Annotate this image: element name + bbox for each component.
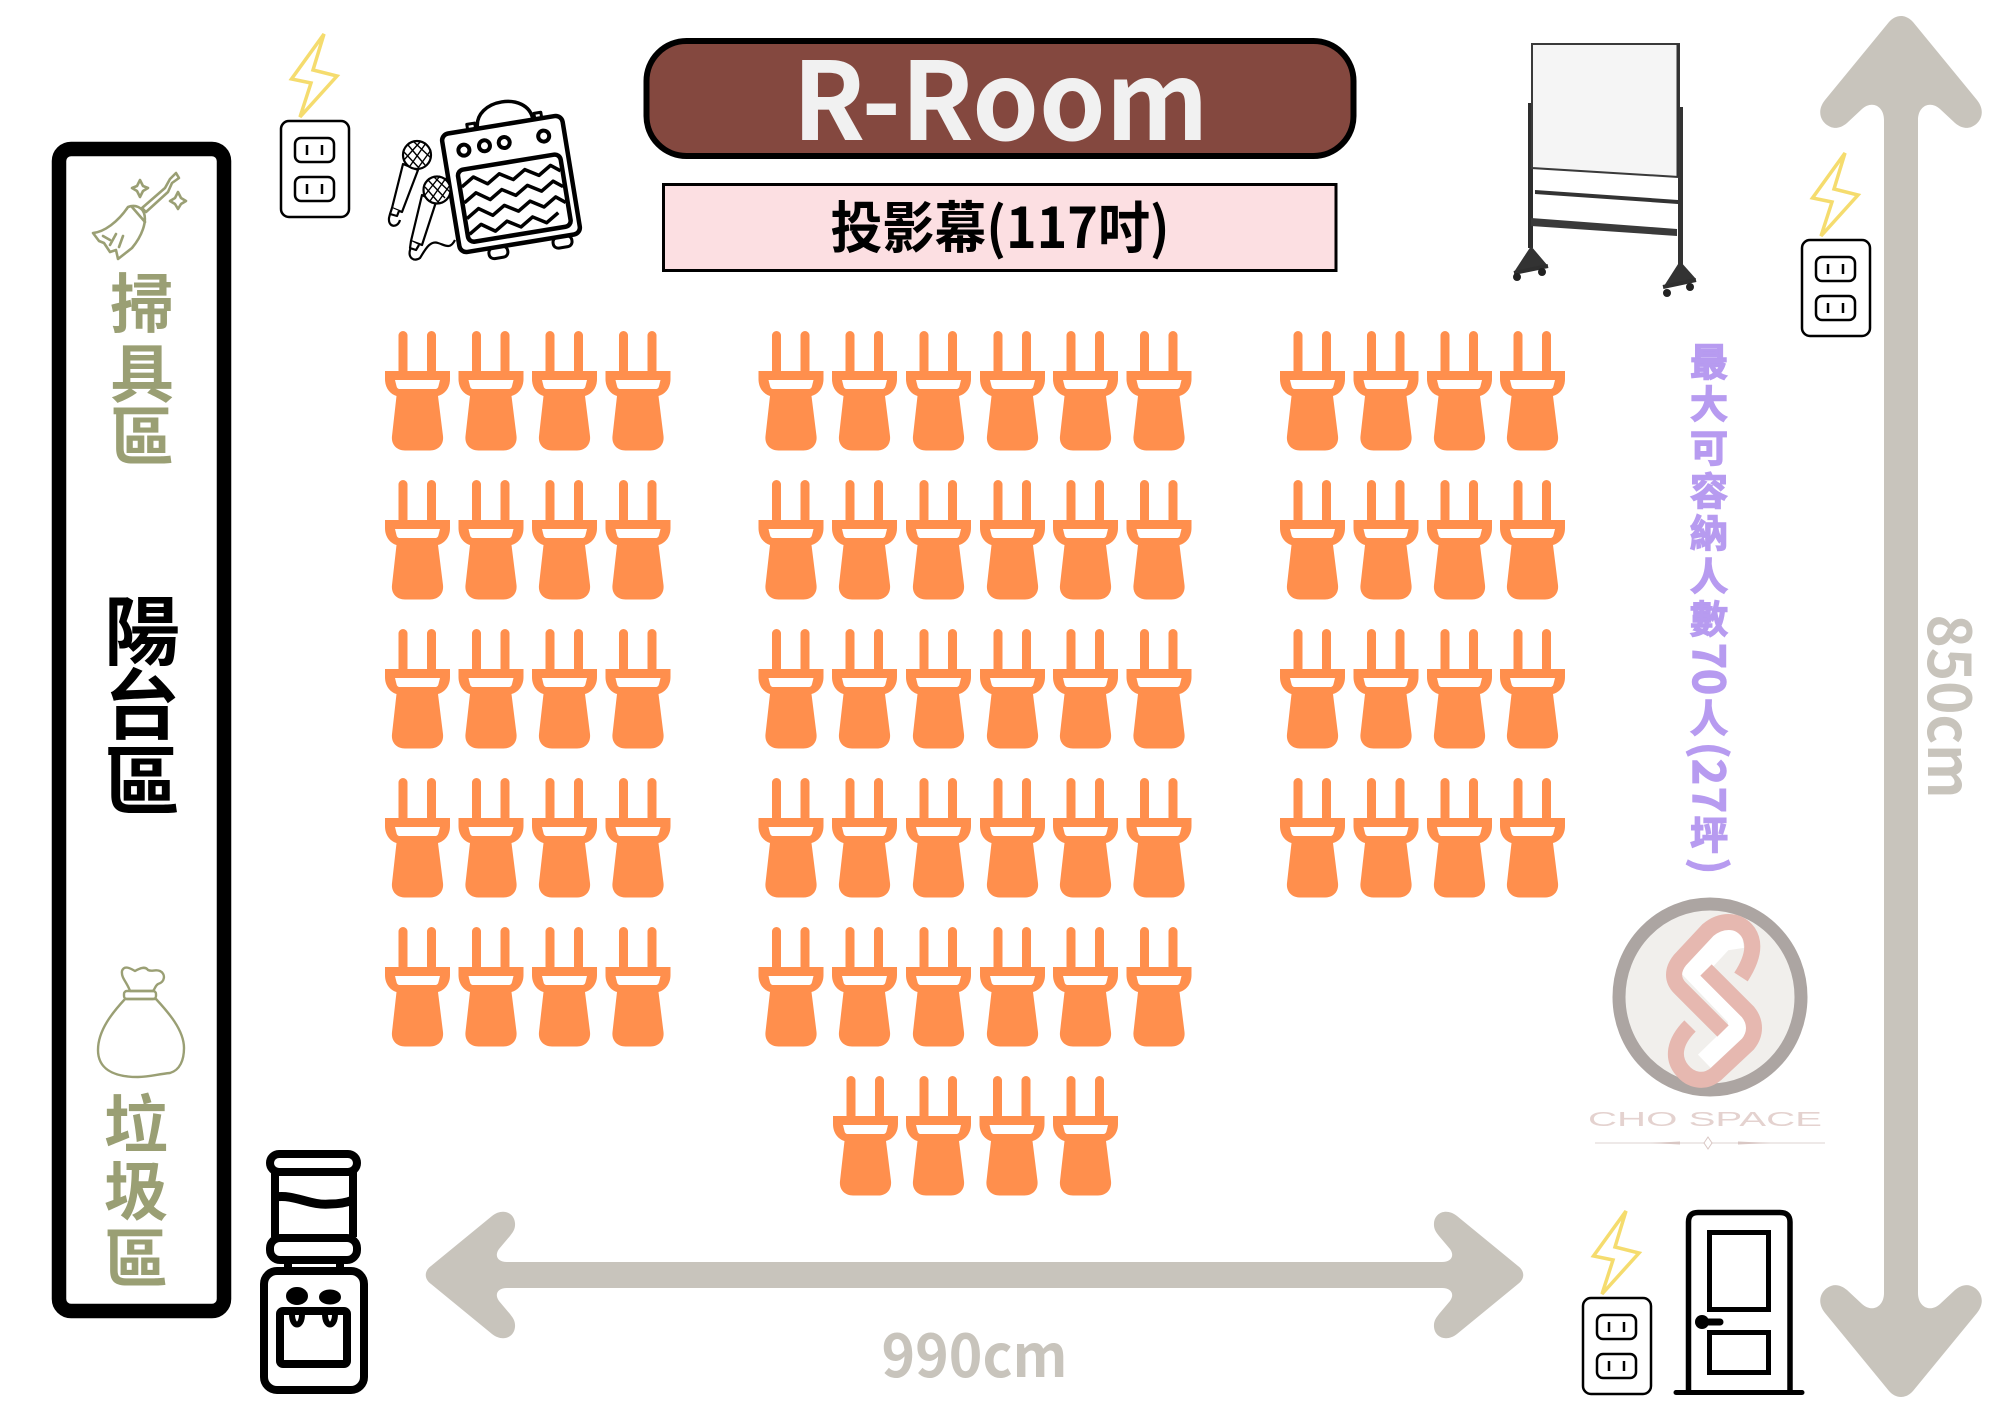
icon: power outlet [281, 121, 349, 217]
icon: door power outlet [1583, 1298, 1651, 1394]
capacity label: vertical text: ) [1682, 858, 1743, 874]
title banner: R-Room [792, 16, 1208, 172]
chairs: right block [1280, 331, 1565, 898]
arrow: vertical dimension [1820, 16, 1982, 1397]
capacity label: vertical text: 納 [1690, 503, 1728, 558]
capacity label: vertical text: 2 [1680, 759, 1744, 785]
projection screen label: 投影幕(117吋) [830, 184, 1170, 265]
title banner [646, 16, 1354, 172]
icon: lightning bolt above outlet [292, 34, 337, 117]
capacity label: vertical text: 坪 [1690, 805, 1728, 860]
icon: water dispenser [264, 1154, 364, 1390]
capacity label: vertical text: 數 [1690, 589, 1728, 644]
capacity label: vertical text: 容 [1690, 461, 1728, 516]
dimension label: 850cm: 850cm [1911, 614, 1996, 798]
logo: CHO SPACE: CHO SPACE [1588, 1109, 1822, 1131]
chairs: centre block [758, 331, 1192, 1046]
capacity label: vertical text: 人 [1690, 546, 1728, 601]
icon: whiteboard on stand [1513, 44, 1696, 297]
icon: broom [93, 173, 186, 259]
capacity label: vertical text: ( [1682, 742, 1743, 758]
capacity label: vertical text: 最 [1690, 332, 1728, 387]
icon: trash bag [98, 968, 184, 1077]
capacity label: vertical text: 可 [1690, 418, 1728, 473]
projection screen label [664, 184, 1336, 270]
icon: lightning bolt above right outlet [1812, 153, 1858, 236]
capacity label: vertical text: 7 [1680, 787, 1744, 813]
heading: cleaning tools zone [110, 254, 174, 479]
capacity label: vertical text: 0 [1680, 669, 1744, 695]
capacity label: vertical text [1680, 332, 1744, 874]
icon: door [1676, 1212, 1802, 1392]
icon: lightning bolt above door outlet [1594, 1211, 1639, 1294]
icon: microphones [389, 141, 455, 260]
capacity label: vertical text: 人 [1690, 688, 1728, 743]
heading: garbage zone: 圾 [104, 1142, 168, 1234]
capacity label: vertical text: 7 [1680, 643, 1744, 669]
logo: CHO SPACE [1588, 904, 1825, 1149]
panel: balcony zone frame [59, 149, 224, 1311]
chairs: back row [833, 1076, 1118, 1196]
icon: right power outlet [1802, 240, 1870, 336]
dimension label: 990cm: 990cm [882, 1309, 1068, 1394]
heading: garbage zone: 區 [104, 1209, 168, 1301]
heading: garbage zone: 垃 [104, 1075, 168, 1167]
capacity label: vertical text: 大 [1690, 374, 1728, 429]
heading: cleaning tools zone: 具 [110, 324, 174, 416]
heading: garbage zone [104, 1075, 168, 1301]
heading: balcony zone: 陽 [104, 571, 180, 681]
chairs: left block [385, 331, 670, 1046]
heading: balcony zone: 區 [104, 721, 180, 831]
heading: cleaning tools zone: 區 [110, 387, 174, 479]
heading: balcony zone: 台 [104, 645, 180, 755]
heading: balcony zone [104, 571, 180, 831]
icon: amplifier [437, 93, 583, 264]
heading: cleaning tools zone: 掃 [110, 254, 174, 346]
arrow: horizontal dimension [426, 1212, 1523, 1338]
